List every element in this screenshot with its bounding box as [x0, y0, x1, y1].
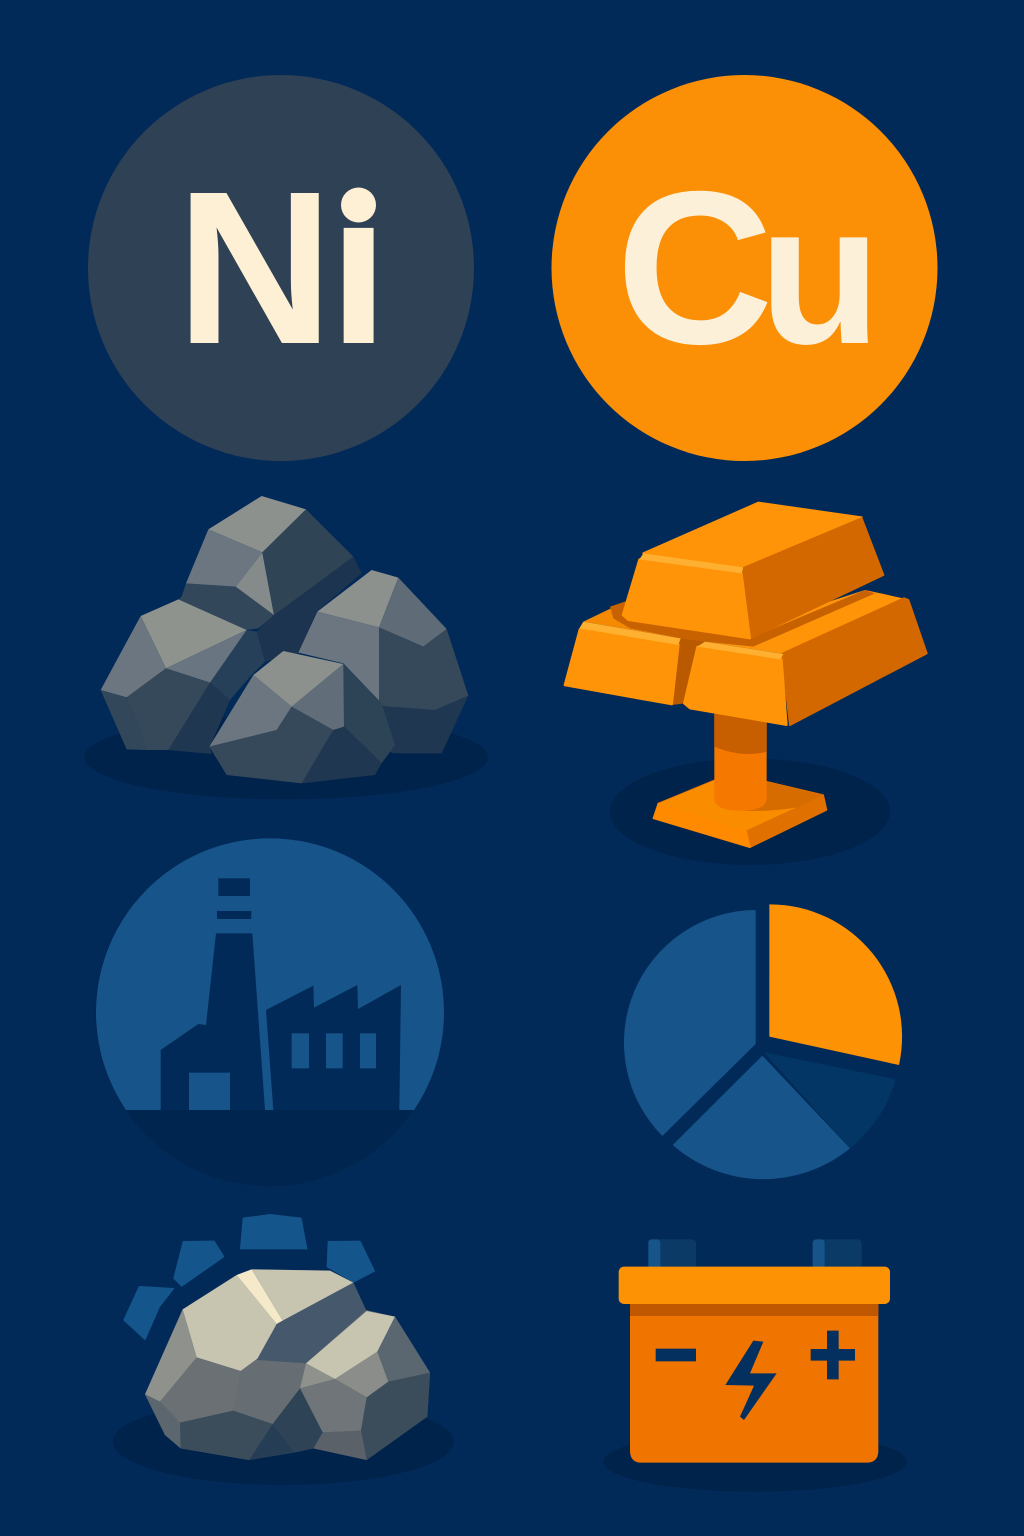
- copper element badge: Cu: [616, 147, 881, 390]
- stand base: [653, 780, 827, 847]
- nickel element badge: [88, 75, 474, 461]
- lower left ingot: [565, 602, 750, 705]
- nickel element badge: Ni: [176, 147, 389, 390]
- minus sign: [656, 1349, 696, 1361]
- slice: left blue: [624, 910, 756, 1136]
- slice: bottom blue: [673, 1056, 850, 1179]
- icon: factory silhouette in circle: [95, 838, 444, 1186]
- pie chart: [624, 904, 902, 1179]
- battery body: [630, 1300, 878, 1463]
- battery lid: [619, 1267, 890, 1304]
- icon: battery: [603, 1239, 907, 1492]
- icon: nickel ore with blue fragments: [113, 1215, 454, 1485]
- battery terminals: [648, 1239, 862, 1269]
- slice: orange: [769, 904, 902, 1065]
- blue fragments: [124, 1215, 374, 1339]
- lightning bolt: [725, 1341, 777, 1420]
- stand pole: [714, 710, 767, 811]
- lower right ingot: [684, 590, 927, 725]
- slice: dark navy: [764, 1052, 896, 1148]
- top ingot: [623, 503, 883, 638]
- plus sign: [811, 1331, 855, 1379]
- icon: nickel ore rock pile: [84, 496, 488, 799]
- copper element badge: [552, 75, 938, 461]
- icon: copper ingots on a stand: [565, 503, 927, 865]
